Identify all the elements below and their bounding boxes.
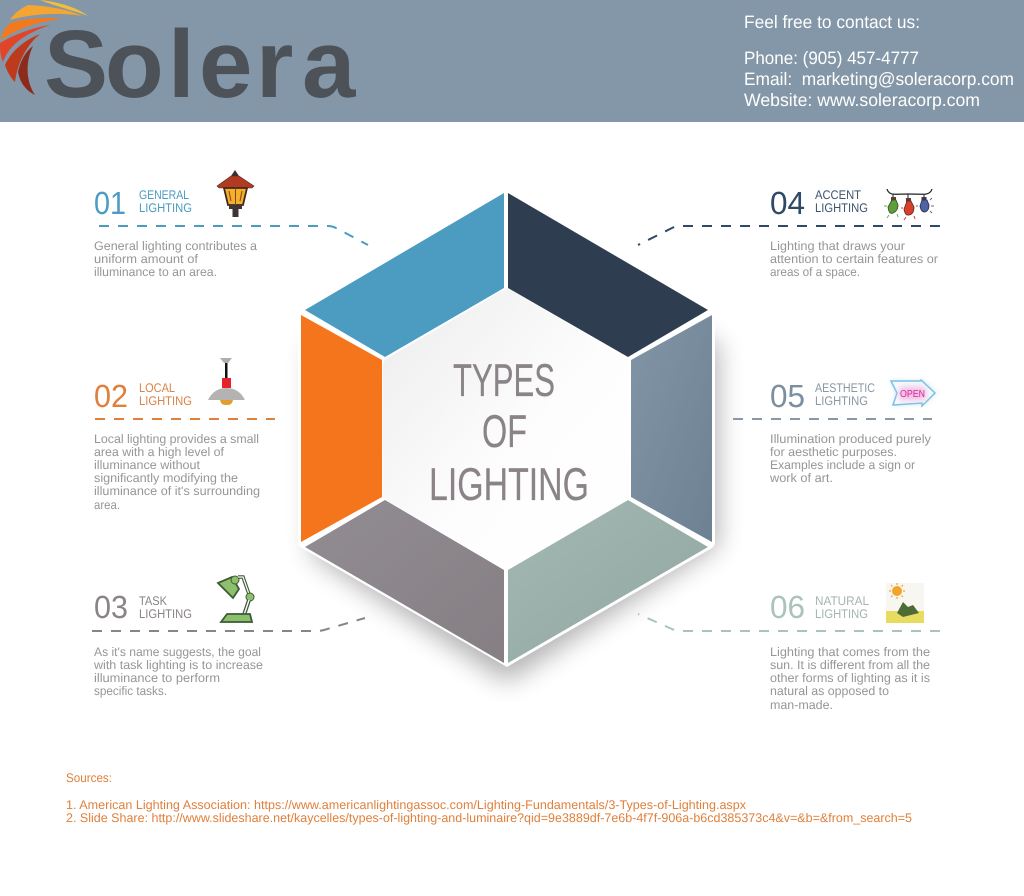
description: uniform amount of xyxy=(94,252,199,266)
title: LIGHTING xyxy=(429,458,589,510)
logo: Solera: Solera xyxy=(44,11,356,118)
item 03 task lighting: TASK xyxy=(139,594,168,608)
item 03 task lighting: 03 xyxy=(94,589,128,625)
item 04 accent lighting: 04 xyxy=(770,185,805,221)
icon: open sign xyxy=(891,380,936,406)
segment: aesthetic xyxy=(631,315,712,542)
connector line xyxy=(92,618,365,631)
item 04 accent lighting: ACCENT xyxy=(815,188,861,202)
description: specific tasks. xyxy=(94,684,167,698)
divider line xyxy=(733,418,932,420)
description xyxy=(770,645,930,712)
sources: 2. Slide Share: http://www.slideshare.net/kaycelles/types-of-lighting-and-luminaire?qid=9e3889df-7e6b-4f7f-906a-b6cd385373c4&v=&b=&from_search=5 xyxy=(66,811,912,825)
description: Local lighting provides a small xyxy=(94,432,259,446)
item 06 natural lighting: 06 xyxy=(770,589,805,625)
description: areas of a space. xyxy=(770,265,860,279)
item 05 aesthetic lighting: 05 xyxy=(770,378,805,414)
description: significantly modifying the xyxy=(94,471,238,485)
title: TYPES xyxy=(453,354,555,406)
title: OF xyxy=(482,405,527,457)
segment: natural xyxy=(508,500,708,663)
item 01 general lighting: 01 xyxy=(94,185,126,221)
icon: open sign: OPEN xyxy=(900,389,925,400)
contact details: Feel free to contact us: xyxy=(744,12,920,32)
contact details xyxy=(744,12,1014,110)
description: area with a high level of xyxy=(94,445,225,459)
contact details: Website: www.soleracorp.com xyxy=(744,90,980,110)
description: work of art. xyxy=(769,471,833,485)
connector line xyxy=(99,226,368,245)
description: Illumination produced purely xyxy=(770,432,932,446)
description: with task lighting is to increase xyxy=(93,658,263,672)
icon: sun over mountains xyxy=(886,583,924,623)
item 05 aesthetic lighting xyxy=(733,378,936,485)
item 02 local lighting: 02 xyxy=(94,378,128,414)
segment: accent xyxy=(508,193,708,357)
segment: local xyxy=(301,315,382,542)
item 06 natural lighting: LIGHTING xyxy=(815,607,868,621)
sources: 1. American Lighting Association: https://www.americanlightingassoc.com/Lighting-Fundamentals/3-Types-of-Lighting.aspx xyxy=(66,798,747,812)
hexagon diagram xyxy=(298,189,718,682)
title xyxy=(429,354,589,510)
item 01 general lighting: LIGHTING xyxy=(139,201,192,215)
icon: string lights xyxy=(884,189,934,220)
connector line xyxy=(638,614,940,631)
description xyxy=(770,239,938,279)
item 01 general lighting xyxy=(94,170,368,279)
description: As it's name suggests, the goal xyxy=(94,645,261,659)
segment: task xyxy=(305,500,504,663)
item 05 aesthetic lighting: AESTHETIC xyxy=(815,381,875,395)
description: man-made. xyxy=(770,698,833,712)
description: Lighting that draws your xyxy=(770,239,905,253)
icon: pendant lamp xyxy=(208,358,245,405)
description xyxy=(93,645,263,698)
item 02 local lighting: LIGHTING xyxy=(139,394,192,408)
item 01 general lighting: GENERAL xyxy=(139,188,189,202)
segment: general xyxy=(305,193,504,357)
item 06 natural lighting xyxy=(638,583,940,712)
contact details: Email: marketing@soleracorp.com xyxy=(744,69,1014,89)
item 03 task lighting: LIGHTING xyxy=(139,607,192,621)
description: illuminance without xyxy=(94,458,201,472)
connector line xyxy=(638,226,940,245)
description xyxy=(94,239,257,279)
description: sun. It is different from all the xyxy=(770,658,930,672)
sources: Sources: xyxy=(66,771,112,785)
divider line xyxy=(95,418,275,420)
item 02 local lighting: LOCAL xyxy=(139,381,175,395)
item 04 accent lighting: LIGHTING xyxy=(815,201,868,215)
item 05 aesthetic lighting: LIGHTING xyxy=(815,394,868,408)
item 04 accent lighting xyxy=(638,185,940,279)
item 02 local lighting xyxy=(94,358,275,512)
description: for aesthetic purposes. xyxy=(770,445,897,459)
description xyxy=(94,432,260,512)
sources xyxy=(66,771,912,825)
description: illuminance to perform xyxy=(94,671,220,685)
description: General lighting contributes a xyxy=(94,239,257,253)
description: area. xyxy=(94,498,120,512)
header banner xyxy=(0,0,1024,122)
description: other forms of lighting as it is xyxy=(770,671,930,685)
item 03 task lighting xyxy=(92,576,365,698)
description xyxy=(769,432,932,485)
contact details: Phone: (905) 457-4777 xyxy=(744,48,919,68)
center hexagon xyxy=(383,288,631,570)
description: attention to certain features or xyxy=(770,252,938,266)
icon: desk lamp xyxy=(218,576,254,622)
description: Lighting that comes from the xyxy=(770,645,930,659)
description: Examples include a sign or xyxy=(770,458,915,472)
description: illuminance to an area. xyxy=(94,265,217,279)
description: natural as opposed to xyxy=(770,684,889,698)
description: illuminance of it's surrounding xyxy=(94,484,260,498)
icon: street lantern xyxy=(217,170,254,217)
item 06 natural lighting: NATURAL xyxy=(815,594,869,608)
